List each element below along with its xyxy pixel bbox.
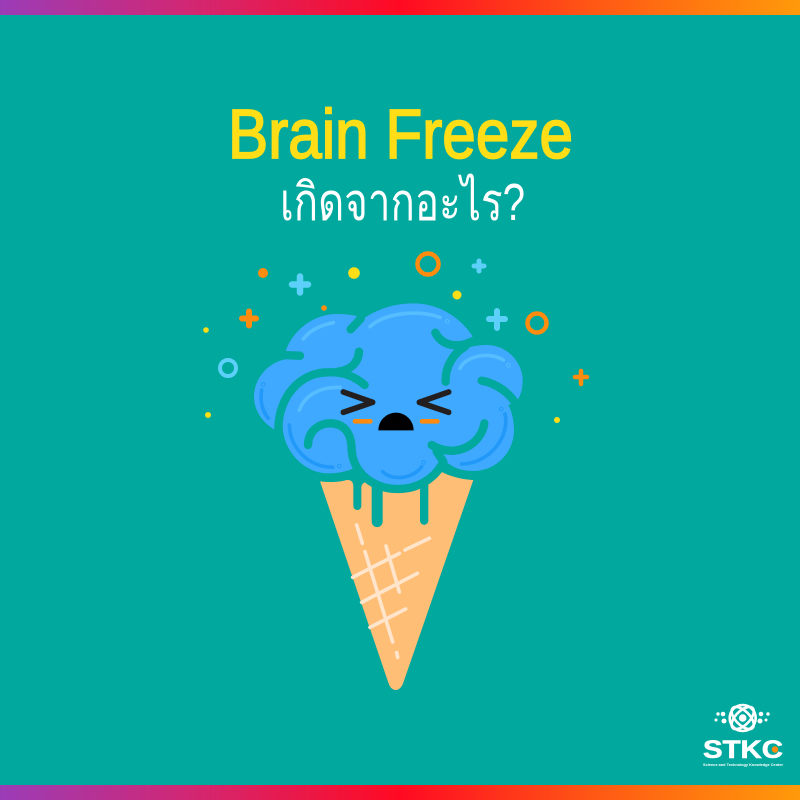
brain fold lines	[278, 319, 517, 489]
logo dots	[714, 712, 770, 724]
subtitle: เกิดจากอะไร?	[280, 173, 525, 232]
logo orange dot	[772, 746, 778, 753]
top gradient bar	[0, 0, 800, 15]
dark shadows	[261, 384, 506, 478]
decorative sparkles	[203, 254, 587, 423]
face: blush	[355, 414, 437, 428]
light highlights	[299, 313, 509, 410]
face: mouth	[378, 413, 414, 430]
ice cream scoop body	[254, 303, 523, 485]
bottom gradient bar	[0, 785, 800, 800]
logo wordmark: STKC	[703, 736, 783, 764]
title: Brain Freeze	[228, 95, 573, 173]
cone	[320, 471, 473, 690]
face: squinting eyes	[343, 392, 449, 412]
ice cream illustration	[254, 303, 523, 690]
logo tagline: Science and Technology Knowledge Center	[703, 762, 783, 767]
logo atom icon	[728, 703, 758, 733]
cone waffle lines	[353, 525, 429, 657]
STKC logo	[703, 703, 783, 767]
